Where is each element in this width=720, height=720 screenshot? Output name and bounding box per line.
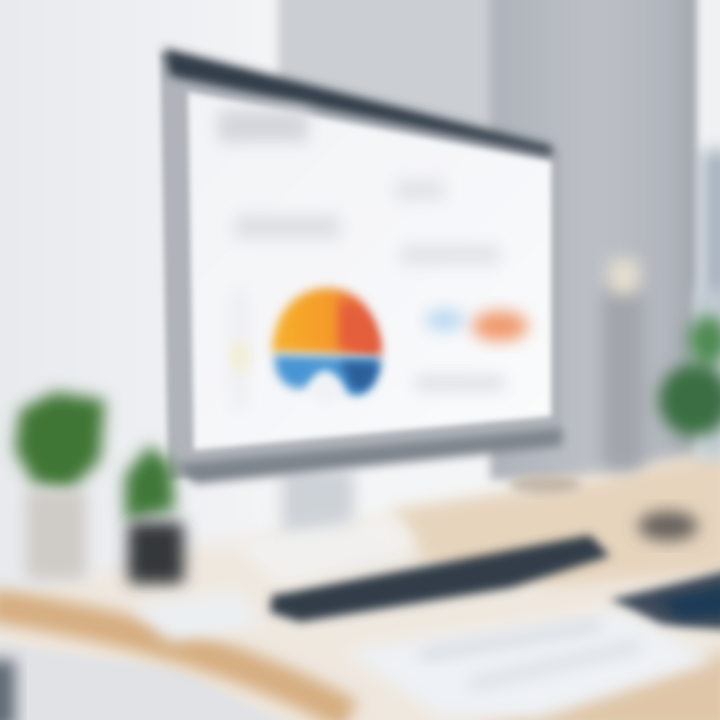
window view at right [695, 290, 720, 460]
plant: right [659, 316, 720, 436]
paper on desk left [130, 590, 262, 642]
mouse and desk objects [509, 474, 698, 541]
plant: left in white pot [15, 392, 105, 580]
monitor bottom edge [175, 428, 562, 484]
notepad papers [345, 610, 715, 718]
screen [188, 92, 551, 450]
screen text blocks [218, 110, 505, 410]
desk [0, 450, 720, 720]
monitor [160, 48, 562, 484]
legend pills [425, 309, 528, 341]
monitor top bar [164, 48, 552, 156]
yellow marker [232, 345, 248, 369]
pie chart [272, 288, 381, 404]
tablet [610, 570, 720, 630]
monitor bezel [160, 52, 562, 480]
plant: small in dark pot [125, 445, 184, 584]
monitor stand [250, 470, 390, 566]
keyboard [230, 515, 610, 622]
object: tall grey bottle [602, 258, 644, 470]
